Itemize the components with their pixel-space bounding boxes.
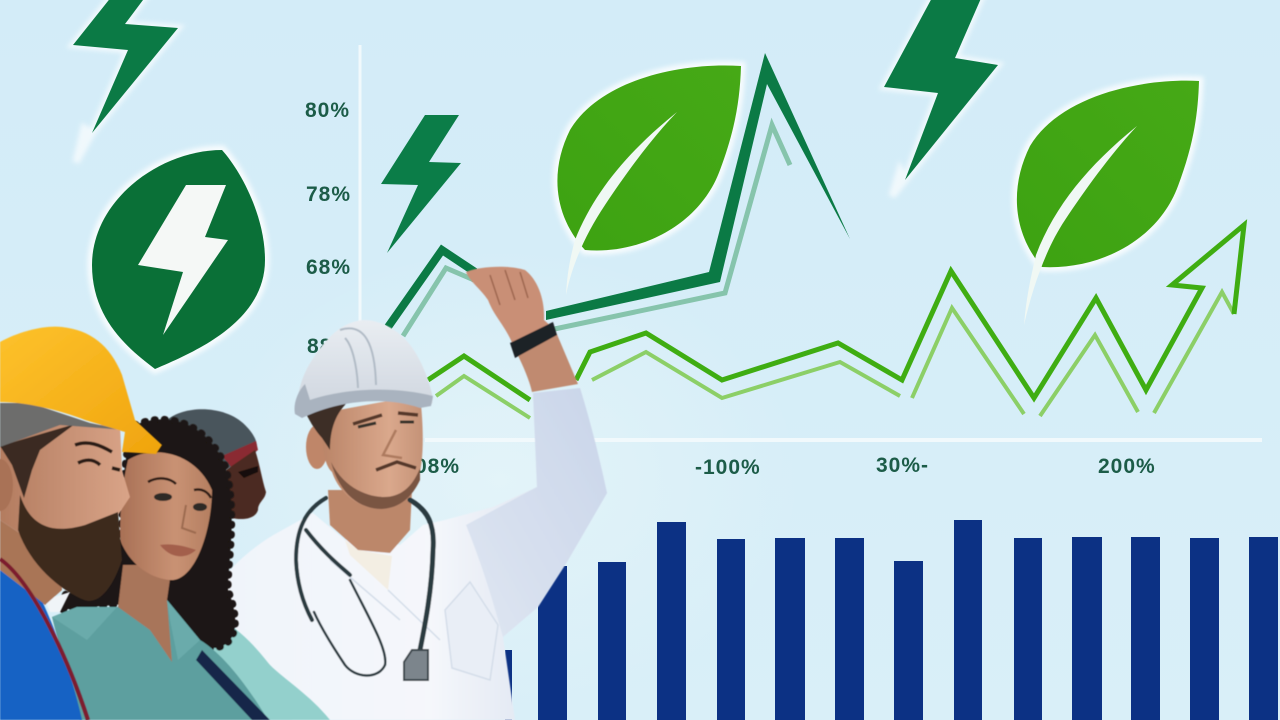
- icon: shield leaf with bolt: [92, 150, 265, 369]
- doctor ear: [306, 425, 328, 469]
- doctor finger lines: [490, 270, 528, 305]
- woman teal shirt: [52, 600, 268, 720]
- doctor nose: [383, 430, 402, 458]
- woman face: [120, 452, 212, 580]
- doctor undershirt: [345, 540, 392, 590]
- axis label: partly hidden: 88%: [307, 335, 352, 358]
- doctor watch: [510, 322, 557, 358]
- doctor neck: [328, 490, 412, 553]
- line chart: bright green series with arrow: [428, 225, 1244, 418]
- icon: green leaf right: [1017, 81, 1199, 325]
- worker beard: [18, 495, 122, 601]
- person: doctor in white hard hat: [217, 267, 607, 720]
- doctor coat folds: [330, 560, 498, 680]
- worker lanyard: [0, 559, 88, 720]
- doctor lab coat: [217, 388, 607, 720]
- woman collar: [52, 600, 200, 660]
- person: woman in back with headscarf: [167, 409, 266, 519]
- line chart: dark green series: [388, 53, 850, 336]
- worker brows and eyes: [75, 443, 120, 470]
- doctor hat: [297, 320, 433, 417]
- doctor hat brim: [294, 384, 433, 418]
- axis label: 30%-: 30%-: [876, 454, 929, 477]
- icon: lightning bolt top left: [73, 0, 178, 162]
- worker hat band: [0, 403, 125, 447]
- worker yellow hard hat: [0, 327, 162, 454]
- axis label: 08%: 08%: [415, 455, 460, 478]
- icon: lightning bolt beside axis: [381, 115, 461, 253]
- person: bearded worker in yellow hard hat: [0, 327, 162, 720]
- doctor raised sleeve: [466, 388, 607, 637]
- axis label: 200%: 200%: [1098, 455, 1156, 478]
- doctor moustache and brows: [353, 413, 418, 470]
- worker coat bit: [45, 592, 70, 612]
- doctor hand: [466, 267, 553, 345]
- doctor hair: [305, 398, 352, 450]
- person: woman with curly hair in teal shirt: [52, 419, 330, 720]
- doctor hat ribs: [340, 328, 376, 388]
- worker ear: [0, 459, 13, 511]
- icon: green leaf centre: [557, 65, 741, 295]
- chart axes: [360, 45, 1262, 440]
- worker face: [0, 425, 130, 560]
- woman curly hair: [60, 419, 235, 648]
- stethoscope: [296, 498, 433, 680]
- axis label: 78%: 78%: [306, 183, 351, 206]
- doctor face: [312, 395, 423, 509]
- doctor eyes: [358, 422, 414, 427]
- worker blue shirt: [0, 570, 82, 720]
- light teal shirt right side: [200, 627, 330, 720]
- woman bag strap: [196, 650, 270, 720]
- worker hair: [0, 424, 75, 498]
- woman features: [148, 478, 211, 556]
- axis label: -100%: -100%: [695, 456, 761, 479]
- woman neck: [118, 565, 172, 662]
- axis label: 80%: 80%: [305, 99, 350, 122]
- doctor beard: [331, 462, 420, 509]
- doctor raised forearm: [513, 325, 578, 392]
- axis label: 68%: 68%: [306, 256, 351, 279]
- worker neck: [0, 520, 62, 605]
- icon: lightning bolt top right: [884, 0, 998, 196]
- bar chart: [505, 520, 1278, 720]
